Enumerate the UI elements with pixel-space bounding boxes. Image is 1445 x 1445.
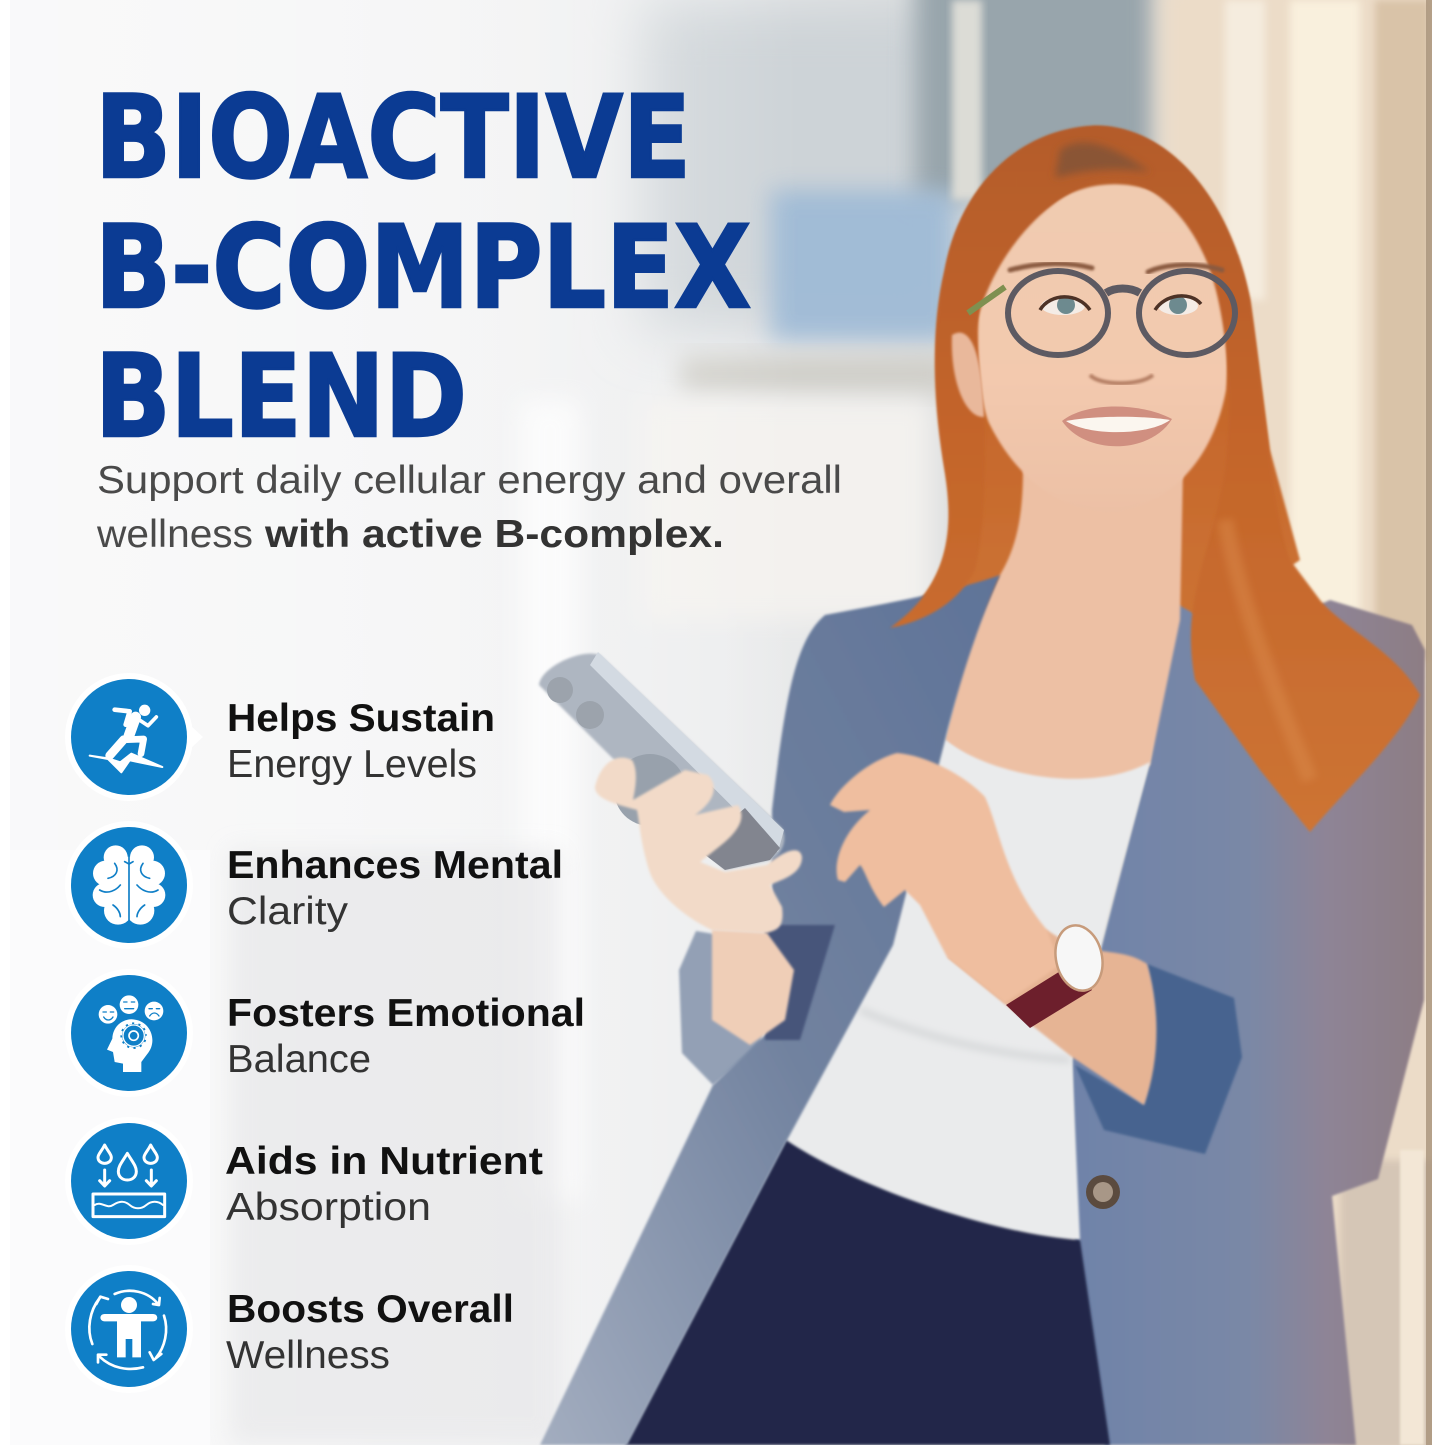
benefit: mental clarity (65, 821, 563, 949)
benefit: emotional balance (65, 969, 585, 1097)
label: boosts overall wellness (226, 1288, 514, 1377)
top folds (860, 1010, 1070, 1060)
label: aids in nutrient absorption: Aids in Nutrient (225, 1140, 543, 1183)
jacket lining shade (765, 925, 835, 1040)
jacket left panel (540, 575, 1000, 1445)
eyes (1040, 296, 1201, 315)
white tank top (786, 740, 1150, 1240)
hair parting shadow (1055, 143, 1150, 178)
label: helps sustain energy levels: Helps Sustain (227, 697, 495, 740)
forearm right (947, 930, 1156, 1105)
ear (952, 333, 984, 417)
label: enhances mental clarity: Enhances Mental (227, 844, 563, 887)
label: enhances mental clarity (227, 844, 563, 933)
smartphone (539, 652, 784, 870)
label: enhances mental clarity: Clarity (227, 890, 349, 933)
subtitle (96, 459, 842, 556)
hand right (830, 753, 1060, 1003)
hair highlight (1225, 520, 1310, 780)
photo: woman with phone (539, 126, 1425, 1445)
jacket right panel (1072, 600, 1425, 1445)
hand holding phone (595, 758, 802, 933)
title: BIOACTIVE (95, 71, 691, 204)
glasses (968, 271, 1235, 355)
label: fosters emotional balance (227, 992, 585, 1081)
title (95, 71, 751, 463)
label: boosts overall wellness: Boosts Overall (227, 1288, 514, 1331)
label: fosters emotional balance: Fosters Emotional (227, 992, 585, 1035)
subtitle: with active B-complex. (264, 513, 724, 556)
jacket button (1086, 1175, 1120, 1209)
wristwatch (1006, 921, 1108, 1028)
rolled cuff (1075, 964, 1242, 1154)
title: B-COMPLEX (95, 201, 751, 334)
face (978, 184, 1227, 512)
nose (1090, 375, 1153, 383)
icon: droplets absorbed (65, 1117, 193, 1245)
label: helps sustain energy levels: Energy Levels (227, 743, 477, 786)
hair front strands (890, 126, 1420, 832)
hair back (890, 126, 1300, 650)
label: boosts overall wellness: Wellness (226, 1334, 390, 1377)
subtitle: wellness (96, 513, 253, 556)
navy trousers (625, 1140, 1110, 1445)
neck and chest (945, 470, 1183, 783)
eyebrows (1010, 264, 1222, 272)
label: fosters emotional balance: Balance (227, 1038, 371, 1081)
label: aids in nutrient absorption (225, 1140, 543, 1229)
icon: brain (65, 821, 193, 949)
benefit: nutrient absorption (65, 1117, 543, 1245)
benefit: energy levels (65, 673, 495, 801)
label: helps sustain energy levels (227, 697, 495, 786)
icon: head with gear and faces (65, 969, 193, 1097)
icon: figure with circular arrows (65, 1265, 193, 1393)
smile (1062, 406, 1172, 446)
subtitle: Support daily cellular energy and overall (97, 459, 842, 502)
forearm left (712, 930, 794, 1045)
left sleeve grey (679, 931, 780, 1085)
benefit: overall wellness (65, 1265, 514, 1393)
label: aids in nutrient absorption: Absorption (226, 1186, 431, 1229)
icon: runner (65, 673, 203, 801)
title: BLEND (95, 330, 467, 463)
